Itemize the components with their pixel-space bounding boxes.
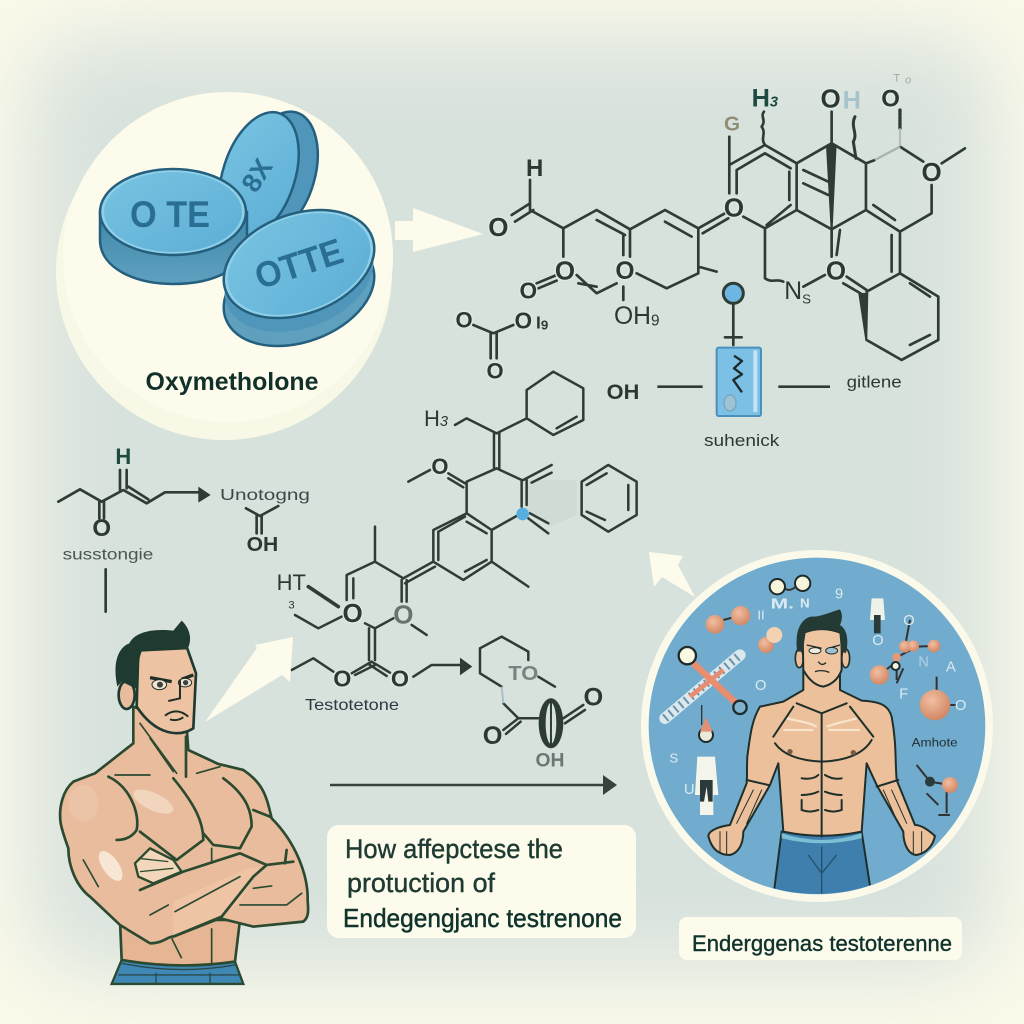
icon: left pill: O TE (130, 194, 210, 235)
head (115, 621, 196, 733)
icon: left pill (100, 169, 247, 284)
atom labels: 9 (651, 313, 659, 330)
chart: small top left molecule: OH (247, 533, 278, 556)
reaction labels (607, 373, 902, 450)
icon: back pill: 8X (236, 154, 279, 197)
atom labels: 3 (288, 599, 295, 611)
chart: middle molecule (277, 372, 637, 772)
atom labels: H3 (752, 85, 778, 113)
icon: DNA strand with atoms (665, 647, 747, 742)
atom labels: N (784, 278, 802, 305)
circle labels: N (918, 655, 929, 671)
icon: small figures (695, 598, 885, 815)
arrow: process (330, 775, 617, 795)
pill label: Oxymetholone (146, 368, 319, 396)
atom labels: O (391, 666, 409, 692)
atom labels: O (515, 308, 532, 334)
atom labels: O (431, 454, 449, 479)
atom labels: I (536, 312, 541, 332)
label: endogenous testosterone (679, 917, 962, 960)
reaction labels: gitlene (847, 373, 902, 392)
atom labels: O (343, 598, 363, 628)
atom labels: O (922, 157, 942, 187)
pants (112, 960, 243, 984)
chart: large molecule (455, 73, 965, 383)
circle labels: O (872, 633, 884, 649)
atom labels (455, 73, 942, 383)
circle labels: N (800, 595, 810, 610)
atom labels: H (526, 155, 543, 182)
circle labels: O (955, 698, 966, 714)
atom labels: S (802, 292, 811, 307)
circle labels: F (899, 686, 908, 702)
arrow: pills to molecule (395, 208, 483, 252)
chart: small top left molecule: susstongie (63, 546, 153, 563)
atom labels (277, 406, 603, 772)
circle labels: S (669, 751, 678, 766)
torso and arms (60, 707, 308, 965)
chart: small top left molecule (58, 444, 310, 612)
callout: how it affects production (327, 825, 636, 938)
atom labels: O (486, 358, 504, 383)
arrow: circle to molecule (649, 552, 695, 597)
atom labels: O (583, 683, 603, 711)
atom labels: O (333, 666, 351, 692)
circle labels: 9 (835, 586, 843, 602)
atom labels: O (393, 599, 413, 629)
atom labels: G (724, 113, 740, 136)
atom labels: O (488, 212, 508, 242)
atom labels: O (615, 258, 635, 285)
reaction labels: OH (607, 380, 639, 404)
atom labels: OH (535, 751, 564, 772)
callout: how it affects production: How affepctese the (345, 834, 563, 864)
atom labels: O (826, 256, 846, 286)
circle labels: U (684, 782, 695, 798)
atom labels: Testotetone (305, 697, 399, 714)
atom labels: O (821, 83, 841, 113)
atom labels: O (555, 255, 575, 285)
chart: small top left molecule: O (92, 515, 111, 542)
atom labels: T (893, 73, 900, 85)
icon: atoms (706, 576, 958, 815)
atom labels: TO (508, 663, 538, 685)
atom labels: H3 (424, 406, 449, 431)
atom labels: o (905, 74, 911, 86)
icon: vial (717, 348, 761, 416)
label: endogenous testosterone: Enderggenas testoterenne (692, 931, 952, 956)
atom labels: 9 (541, 318, 548, 333)
atom labels: O (455, 307, 473, 332)
circle labels (669, 586, 966, 798)
atom labels: O (881, 86, 900, 113)
atom labels: HT (277, 570, 306, 595)
reaction labels: suhenick (704, 431, 780, 450)
illustration: man with crossed arms (60, 621, 308, 984)
circle labels: O (903, 613, 915, 629)
callout: how it affects production: Endegengjanc testrenone (343, 903, 622, 933)
illustration: muscular man (708, 609, 935, 897)
atom labels: O (483, 722, 502, 750)
atom labels: O (724, 193, 744, 223)
atom labels: O (520, 277, 537, 303)
atom labels: H (843, 86, 861, 114)
icon: right pill (209, 190, 389, 366)
circle labels: M. (771, 596, 794, 612)
chart: small top left molecule: Unotogng (220, 487, 310, 504)
panel: endogenous testosterone circle (641, 550, 993, 902)
circle labels: A (946, 660, 956, 676)
panel: oxymetholone pills (56, 92, 393, 440)
chart: small top left molecule: H (115, 444, 131, 469)
circle labels: O (755, 678, 766, 694)
circle labels: II (757, 607, 765, 622)
atom labels: OH (614, 303, 651, 330)
icon: right pill: OTTE (250, 230, 348, 297)
callout: how it affects production: protuction of (347, 868, 495, 898)
arrow: man to molecule (205, 637, 293, 722)
circle labels: Amhote (912, 736, 958, 750)
icon: back pill (205, 102, 331, 248)
